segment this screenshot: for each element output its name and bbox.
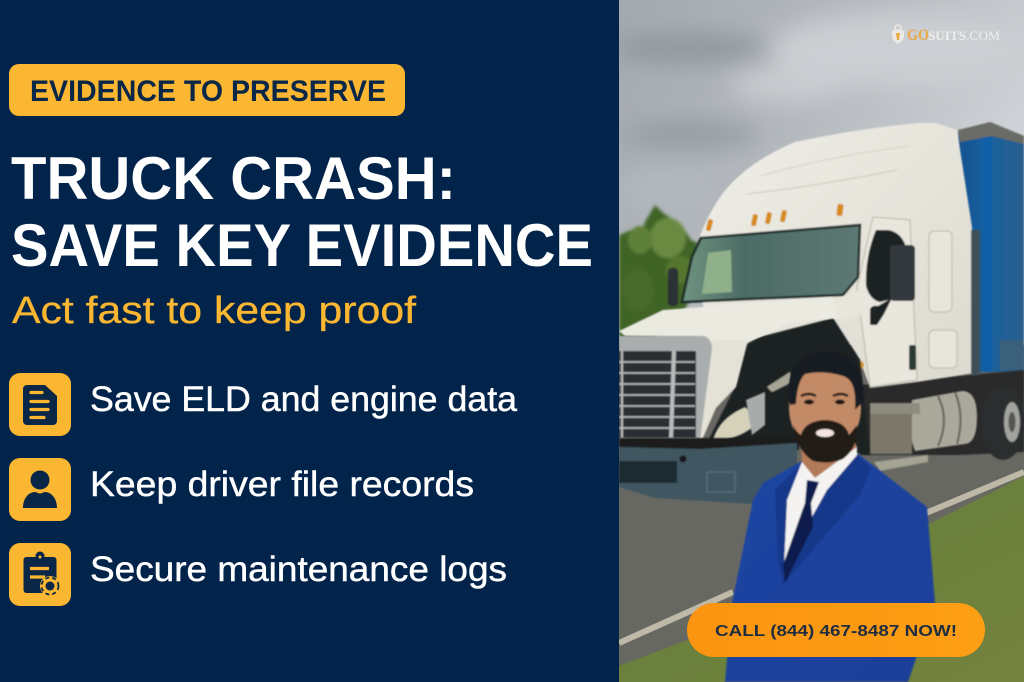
call to action button: CALL (844) 467-8487 NOW! xyxy=(715,623,957,640)
lapel xyxy=(783,455,871,585)
chassis and wheel xyxy=(860,370,1024,460)
logo: gosuits.com: GO xyxy=(907,27,929,44)
logo: gosuits.com: .COM xyxy=(966,28,1000,43)
hood and fender xyxy=(619,290,862,440)
engine bay damage xyxy=(706,318,870,455)
attorney portrait xyxy=(725,352,935,682)
side mirror xyxy=(890,245,915,301)
road xyxy=(619,430,1024,672)
side mirror arm xyxy=(870,298,892,325)
head xyxy=(788,371,862,436)
eyes and brows xyxy=(801,394,848,404)
marker lights xyxy=(706,204,844,232)
truck cab xyxy=(668,123,980,388)
trees xyxy=(619,205,698,363)
necktie xyxy=(783,480,819,583)
call to action button xyxy=(687,603,985,657)
chrome grille xyxy=(619,336,712,440)
smile xyxy=(816,429,834,437)
sky xyxy=(610,0,1024,345)
logo: gosuits.com: SUITS xyxy=(928,28,966,43)
subtitle: Act fast to keep proof xyxy=(12,290,416,332)
photo base xyxy=(619,345,1024,666)
windshield xyxy=(682,225,860,302)
icon: document xyxy=(9,373,71,436)
hair xyxy=(789,352,863,410)
title xyxy=(11,145,593,279)
list item: ELD data xyxy=(9,373,518,436)
icon: person xyxy=(9,458,71,521)
fuel tank and steps xyxy=(870,391,977,471)
suit jacket xyxy=(725,453,935,682)
photo: damaged truck with attorney xyxy=(610,0,1024,682)
list item: maintenance logs: Secure maintenance logs xyxy=(90,550,507,589)
panel: navy content panel xyxy=(0,0,619,682)
list item: ELD data: Save ELD and engine data xyxy=(90,380,518,419)
icon: shield lock xyxy=(892,25,904,44)
front bumper xyxy=(619,438,799,504)
grass verge xyxy=(619,476,1024,682)
list item: maintenance logs xyxy=(9,543,507,606)
logo: gosuits.com xyxy=(892,25,1000,44)
title: TRUCK CRASH: xyxy=(11,145,456,212)
list item: driver file: Keep driver file records xyxy=(90,465,474,504)
left mirror xyxy=(668,268,678,306)
trailer xyxy=(958,122,1024,372)
beard xyxy=(793,420,857,463)
badge: evidence to preserve xyxy=(9,64,405,116)
neck xyxy=(800,442,858,478)
shirt collar xyxy=(784,447,857,567)
icon: clipboard with gear xyxy=(9,543,71,606)
door xyxy=(857,217,917,387)
road edge line xyxy=(619,472,1024,643)
title: SAVE KEY EVIDENCE xyxy=(11,212,593,279)
list item: driver file xyxy=(9,458,474,521)
sleeper panels xyxy=(929,231,952,312)
badge: evidence to preserve: EVIDENCE TO PRESERVE xyxy=(30,75,386,108)
